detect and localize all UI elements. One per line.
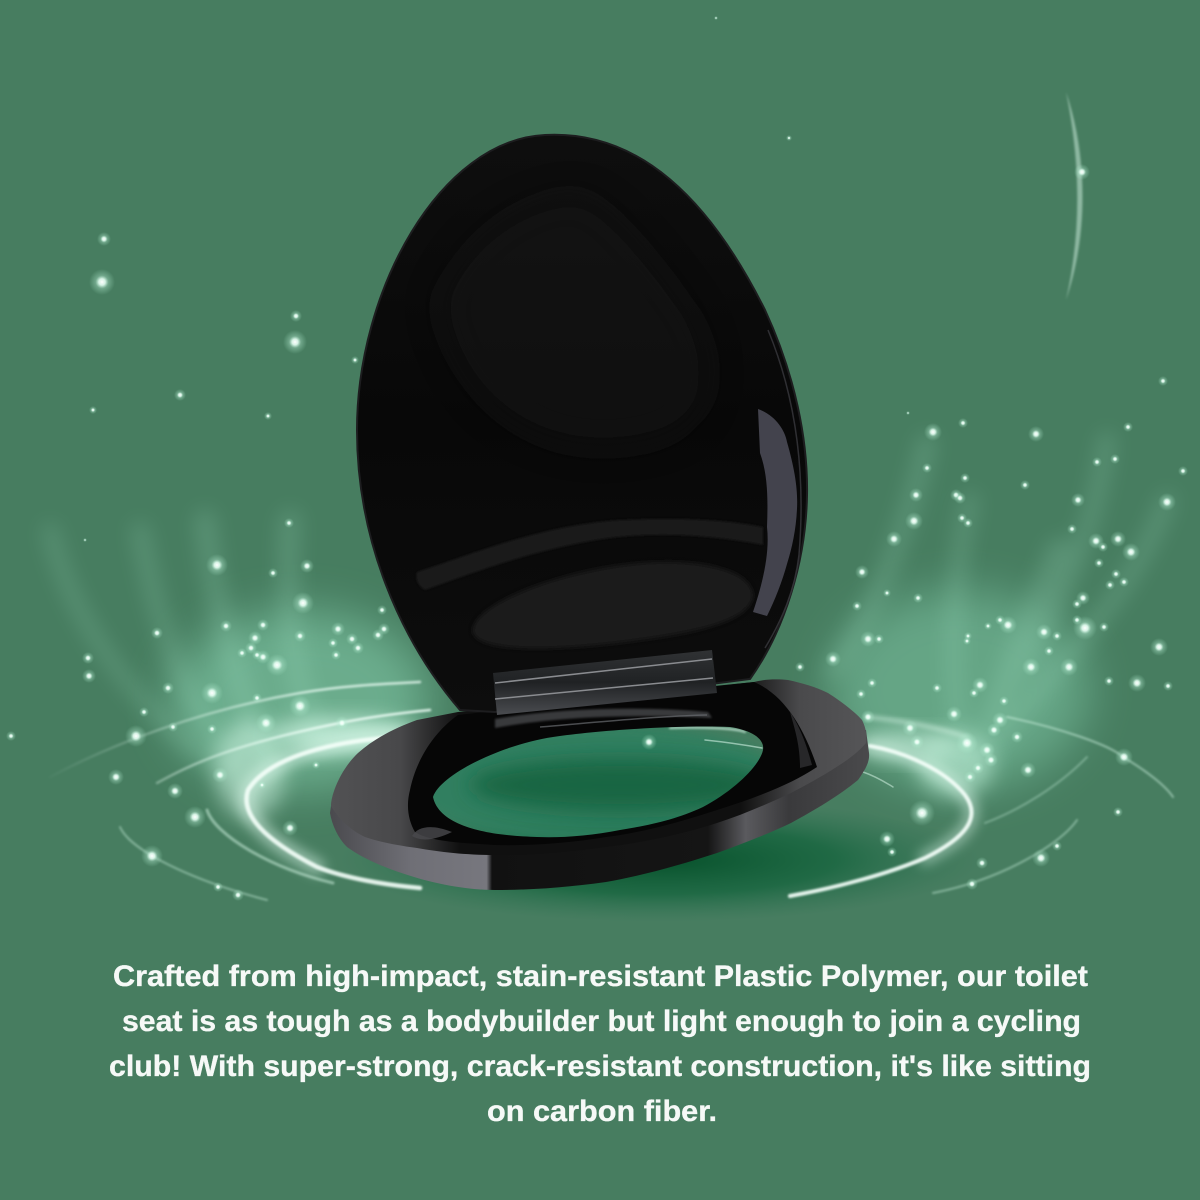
sparkles [6,16,1188,901]
lid rim highlight [765,330,801,648]
seat side band [330,730,869,890]
hinge [493,650,717,715]
seat right wall shine [790,712,812,768]
toilet seat product [330,135,869,890]
shadow under seat [340,798,980,922]
lid reflection: lower ellipse [473,562,753,648]
description text: seat is as tough as a bodybuilder but light enough to join a cycling [122,1005,1081,1038]
seat front-left shine [412,827,452,839]
description text: club! With super-strong, crack-resistant construction, it's like sitting [109,1050,1091,1083]
seat inner wall shine [495,709,712,728]
lid reflection: right edge [753,409,797,616]
lid reflection: lower band [416,519,763,590]
seat inner wall [408,682,817,845]
seat ring [330,679,869,890]
glow: light rings on the floor [50,682,1173,900]
seat top face [331,679,866,855]
shaded green visible through the seat opening [410,723,790,847]
description text: Crafted from high-impact, stain-resistant Plastic Polymer, our toilet [113,960,1088,993]
seat inner wall second streak [540,715,707,727]
lid reflection: upper arch [437,194,710,449]
description text: on carbon fiber. [487,1095,717,1128]
glow: soft light beams and wings [50,440,1167,820]
lid [357,135,807,712]
description text [109,960,1091,1128]
arc: upper right light streak [1066,92,1083,300]
